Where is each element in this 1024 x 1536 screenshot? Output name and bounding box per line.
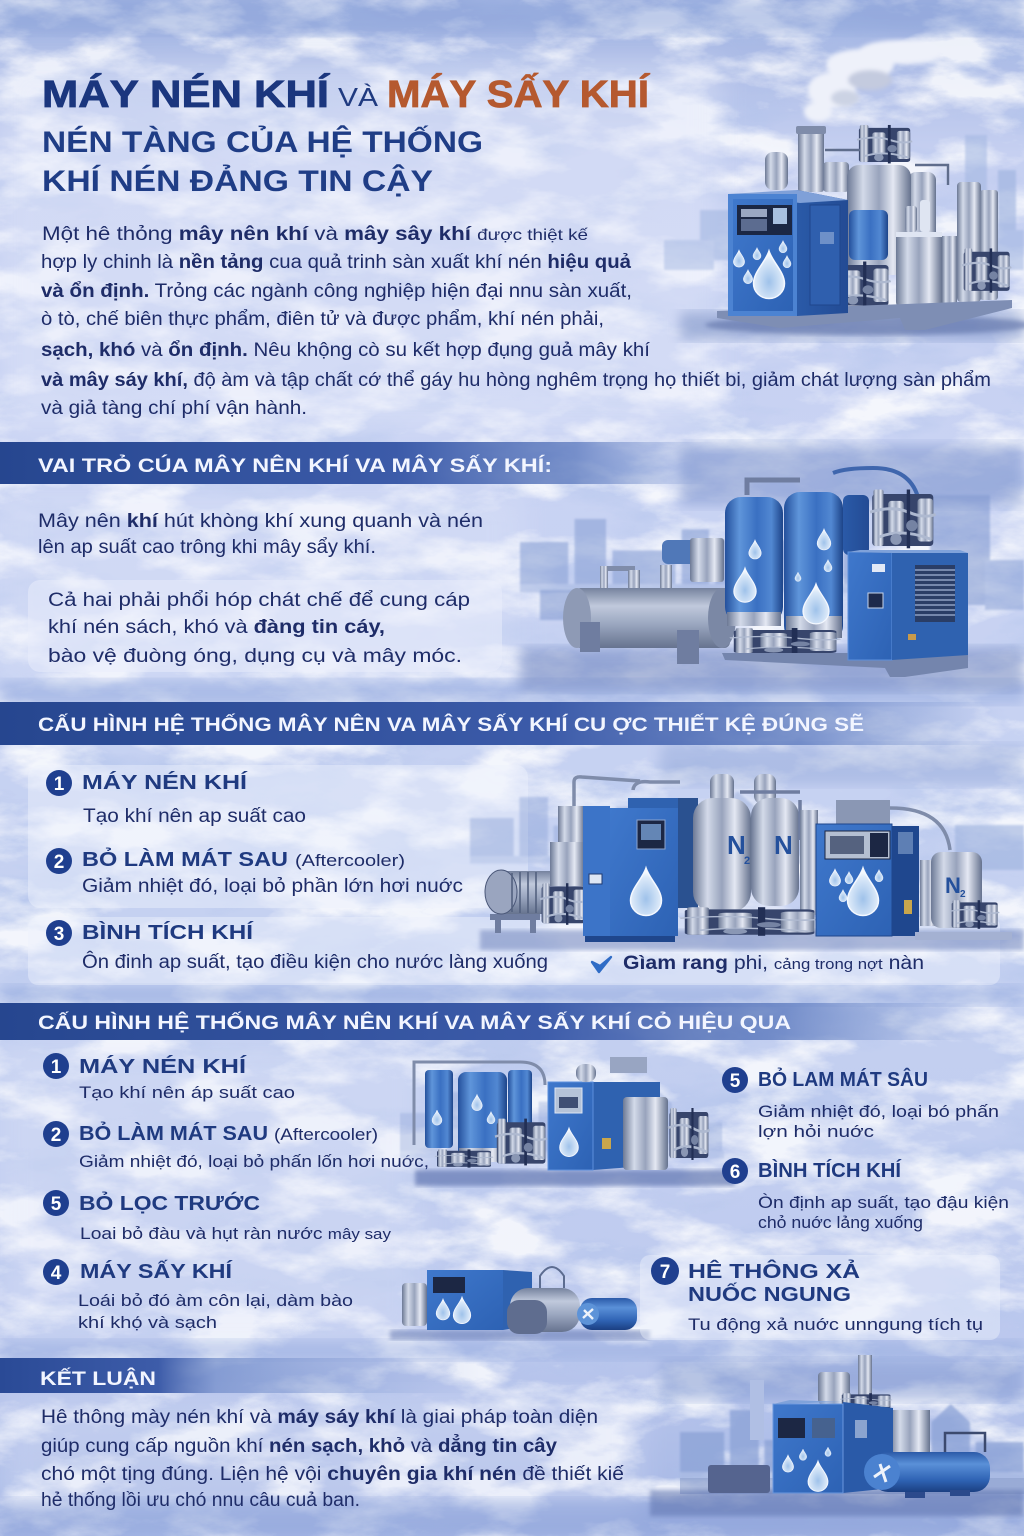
section band: effective system configuration bbox=[0, 1003, 980, 1040]
right N2 tank: 2 bbox=[960, 889, 966, 900]
right N2 tank bbox=[915, 852, 1012, 940]
item 3 panel: BÌNH TÍCH KHÍ bbox=[82, 921, 254, 944]
item 2: 2 bbox=[54, 852, 64, 873]
subtitle bbox=[42, 125, 483, 198]
component 1: 1 bbox=[51, 1057, 62, 1078]
title line 1: MÁY SẤY KHÍ bbox=[387, 72, 651, 116]
section band: effective system configuration: CẤU HÌNH HỆ THỐNG MÂY NÊN KHÍ VA MÂY SẤY KHÍ CỎ HIỆU QUA bbox=[38, 1012, 791, 1034]
intro paragraph bbox=[41, 224, 991, 419]
item 2: (Aftercooler) bbox=[295, 851, 405, 870]
role text: lên ap suất cao trông khi mây sẩy khí. bbox=[38, 537, 376, 558]
component 3: 5 bbox=[51, 1194, 62, 1215]
component 1 bbox=[43, 1053, 295, 1102]
component 5: Giảm nhiệt đó, loại bó phấn bbox=[758, 1102, 999, 1121]
section band: conclusion bbox=[0, 1358, 480, 1393]
component 1: Tạo khí nên áp suất cao bbox=[79, 1083, 295, 1102]
N2 tanks: 2 bbox=[744, 855, 750, 867]
conclusion text: Hê thông mày nén khí và máy sáy khí là giai pháp toàn diện bbox=[41, 1407, 598, 1428]
icon: check mark bbox=[592, 957, 611, 972]
role callout panel bbox=[28, 580, 502, 672]
component 4: MÁY SẤY KHÍ bbox=[80, 1260, 233, 1283]
item 1: 1 bbox=[54, 774, 65, 795]
illustration: hero compressor plant bbox=[664, 125, 1024, 340]
item 1: MÁY NÉN KHÍ bbox=[82, 771, 248, 794]
second cabinet bbox=[816, 800, 950, 936]
N2 tanks: N bbox=[727, 830, 746, 860]
benefit note: Gìam rang phi, cảng trong nợt nàn bbox=[623, 953, 924, 974]
skid bbox=[722, 653, 968, 677]
component 5 bbox=[722, 1067, 999, 1141]
component 3: Loai bỏ đàu và hụt ràn nước mây say bbox=[80, 1224, 392, 1243]
cabinet with drops bbox=[728, 190, 848, 316]
component 2: 2 bbox=[51, 1125, 61, 1146]
conclusion text: giúp cung cấp nguồn khí nén sạch, khỏ và dẳng tin cây bbox=[41, 1435, 557, 1457]
cabinet bbox=[773, 1400, 893, 1493]
item 3 panel bbox=[28, 917, 1000, 985]
component 4: khí khọ́ và sạch bbox=[78, 1313, 217, 1332]
steel tanks bbox=[765, 125, 1011, 308]
illustration: smoke plume bbox=[804, 40, 942, 122]
component 5: lợn hỏi nuớc bbox=[758, 1122, 875, 1141]
component 6 bbox=[722, 1158, 1009, 1232]
tank group bbox=[414, 1062, 547, 1168]
component 1: MÁY NÉN KHÍ bbox=[79, 1055, 247, 1078]
title line 1: VÀ bbox=[338, 82, 379, 112]
section band: conclusion: KẾT LUẬN bbox=[40, 1368, 156, 1390]
conclusion text: chó một tịng đúng. Liện hệ vội chuyên gia khí nén đề thiết kiế bbox=[41, 1464, 624, 1485]
blue cabinet bbox=[583, 798, 698, 942]
component 4: 4 bbox=[51, 1263, 62, 1284]
section band: proper system configuration bbox=[0, 702, 1000, 745]
right N2 tank: N bbox=[945, 873, 961, 898]
intro paragraph: hợp ly chinh là nền tảng cua quả trinh sàn xuất khí nén hiệu quả bbox=[41, 252, 631, 273]
subtitle: NÉN TÀNG CỦA HỆ THỐNG bbox=[42, 125, 483, 159]
N2 tanks bbox=[678, 774, 819, 936]
illustration: air receiver and dryer towers bbox=[520, 468, 1024, 690]
item 1: Tạo khí nên ap suất cao bbox=[83, 806, 306, 827]
component 7 panel: 7 bbox=[660, 1262, 670, 1283]
role callout panel: khí nén sách, khó và đàng tin cáy, bbox=[48, 617, 385, 638]
component 7 panel: HÊ THÔNG XẢ bbox=[688, 1259, 860, 1283]
item 1 bbox=[46, 770, 306, 827]
drum bbox=[485, 870, 550, 933]
conclusion text bbox=[41, 1407, 624, 1511]
blue cabinet bbox=[548, 1057, 660, 1170]
component 6: 6 bbox=[730, 1162, 740, 1183]
intro paragraph: và mây sáy khí, độ àm và tập chất cớ thể gáy hu hòng nghêm trọng họ thiết bi, giảm chát lượng sàn phẩm bbox=[41, 370, 991, 391]
component 6: chỏ nuớc lảng xuống bbox=[758, 1213, 923, 1232]
intro paragraph: sạch, khó và ổn định. Nêu khộng cò su kết hợp đụng guả mây khí bbox=[41, 340, 651, 361]
component 7 panel: NUỐC NGUNG bbox=[688, 1282, 851, 1306]
illustration: nitrogen and dryer skid bbox=[470, 774, 1024, 950]
title block bbox=[42, 72, 651, 198]
blue tank bbox=[849, 210, 888, 260]
component 7 panel: Tu động xả nuớc unngung tích tụ bbox=[688, 1315, 983, 1334]
item 3 panel: Ôn đinh ap suất, tạo điều kiện cho nước làng xuống bbox=[82, 951, 548, 973]
illustration: compressor group bbox=[400, 1057, 735, 1186]
left component list bbox=[43, 1053, 429, 1332]
component 4 bbox=[43, 1259, 353, 1332]
conclusion text: hẻ thống lồi ưu chó nnu câu cuả ban. bbox=[41, 1490, 360, 1511]
component 3: BỎ LỌC TRƯỚC bbox=[79, 1191, 260, 1215]
intro paragraph: Một hê thỏng mây nên khí và mây sây khí được thiệt kế bbox=[42, 224, 588, 245]
dryer towers bbox=[725, 468, 936, 654]
component 6: BÌNH TÍCH KHÍ bbox=[758, 1159, 901, 1182]
item 2: BỎ LÀM MÁT SAU bbox=[82, 847, 288, 871]
role callout panel: bào vệ đuòng óng, dụng cụ và mây móc. bbox=[48, 646, 462, 667]
item 2: Giảm nhiệt đó, loại bỏ phần lớn hơi nuớc bbox=[82, 876, 463, 897]
component 2 bbox=[43, 1121, 429, 1171]
component 2: Giảm nhiệt đó, loại bỏ phấn lốn hơi nuớc, bbox=[79, 1152, 429, 1171]
component 3 bbox=[43, 1190, 392, 1243]
role text: Mây nên khí hút khòng khí xung quanh và nén bbox=[38, 511, 483, 532]
right component list bbox=[722, 1067, 1009, 1232]
item 2 bbox=[46, 847, 463, 897]
blue cylinder bbox=[864, 1433, 990, 1498]
aftercooler cabinet bbox=[848, 550, 968, 660]
illustration: conclusion dryer with city skyline bbox=[650, 1355, 1024, 1516]
skid base bbox=[717, 300, 1012, 330]
section band: proper system configuration: CẤU HÌNH HỆ THỐNG MÂY NÊN VA MÂY SẤY KHÍ CU ỢC THIẾT KỆ ĐÚNG SẼ bbox=[38, 714, 864, 736]
component 4: Loái bỏ đó àm côn lại, dàm bào bbox=[78, 1291, 353, 1310]
role text bbox=[38, 511, 483, 558]
illustration: dryer group bbox=[390, 1267, 650, 1340]
item 3 panel: 3 bbox=[54, 924, 64, 945]
section band: role bbox=[0, 442, 720, 484]
component 5: BỎ LAM MÁT SÂU bbox=[758, 1067, 928, 1091]
configuration list panel bbox=[28, 765, 528, 908]
intro paragraph: và ổn định. Trỏng các ngành công nghiệp hiện đại nnu sàn xuất, bbox=[41, 281, 632, 302]
role callout panel: Cả hai phải phổi hóp chát chế để cung cáp bbox=[48, 590, 470, 611]
horizontal receiver tank bbox=[563, 538, 736, 664]
component 2: (Aftercooler) bbox=[274, 1125, 378, 1144]
title line 1: MÁY NÉN KHÍ bbox=[42, 72, 331, 116]
intro paragraph: ò tò, chế biên thực phẩm, điên tử và được phẩm, khí nén phải, bbox=[41, 309, 604, 330]
component 7 panel bbox=[640, 1255, 1000, 1340]
intro paragraph: và giả tàng chí phí vận hành. bbox=[41, 398, 307, 419]
section band: role: VAI TRỎ CÚA MÂY NÊN KHÍ VA MÂY SẤY KHÍ: bbox=[38, 455, 552, 477]
component 6: Òn định ap suất, tạo đậu kiện bbox=[758, 1193, 1009, 1212]
subtitle: KHÍ NÉN ĐẢNG TIN CẬY bbox=[42, 164, 433, 198]
steel tanks bbox=[623, 1097, 668, 1170]
component 5: 5 bbox=[730, 1071, 741, 1092]
component 2: BỎ LÀM MÁT SAU bbox=[79, 1121, 268, 1145]
title line 1 bbox=[42, 72, 651, 116]
N2 tanks: N bbox=[774, 830, 793, 860]
